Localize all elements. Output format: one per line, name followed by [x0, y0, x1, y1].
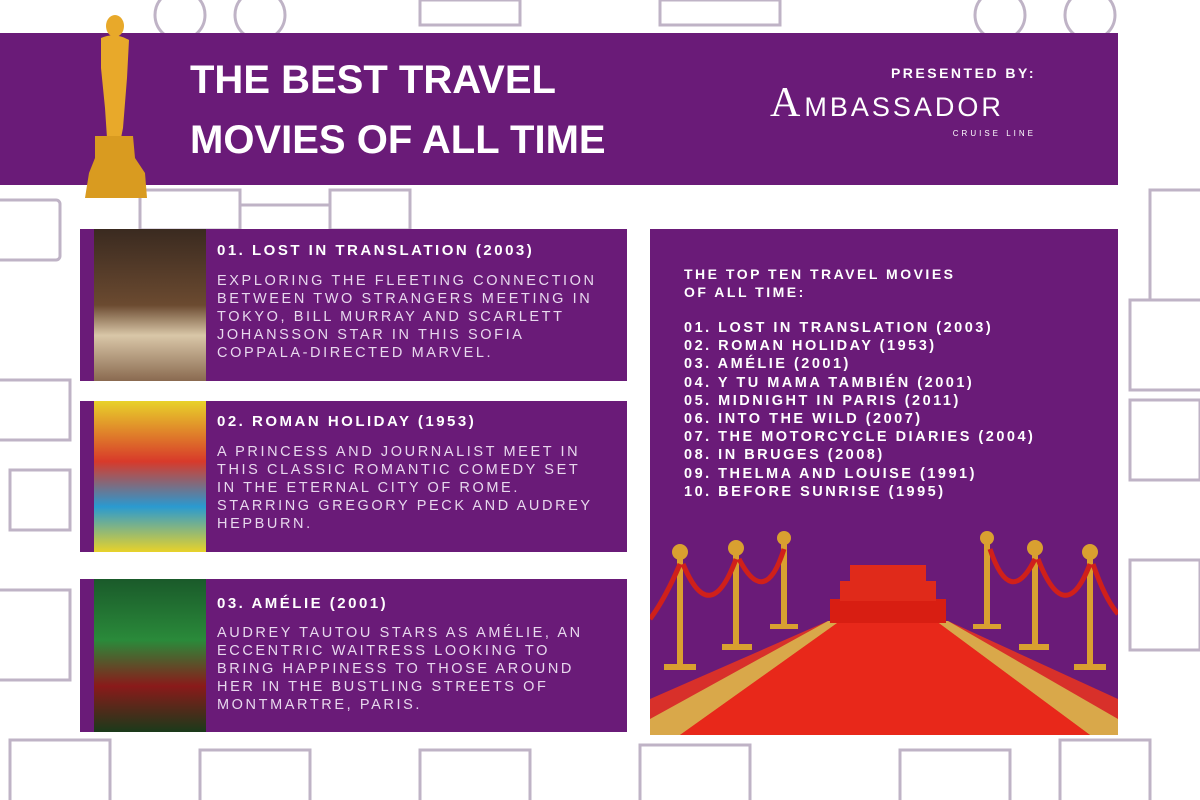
list: 05. MIDNIGHT IN PARIS (2011)	[684, 393, 961, 409]
list heading	[684, 266, 956, 300]
list: 03. AMÉLIE (2001)	[684, 356, 851, 372]
list: 09. THELMA AND LOUISE (1991)	[684, 466, 977, 482]
list heading: THE TOP TEN TRAVEL MOVIES	[684, 266, 956, 282]
text 1: EXPLORING THE FLEETING CONNECTION BETWEEN TWO STRANGERS MEETING IN TOKYO, BILL MURRAY AND SCARLETT JOHANSSON STAR IN THIS SOFIA COPPALA-DIRECTED MARVEL.	[217, 273, 597, 361]
header band	[0, 33, 1118, 185]
list: 08. IN BRUGES (2008)	[684, 447, 885, 463]
heading 2: 02. ROMAN HOLIDAY (1953)	[217, 413, 476, 430]
panel: movie 3	[80, 579, 627, 732]
presented by logo: PRESENTED BY:	[891, 65, 1036, 81]
title: THE BEST TRAVEL	[190, 58, 556, 102]
presented by logo	[770, 65, 1036, 138]
title: MOVIES OF ALL TIME	[190, 118, 606, 162]
icon: oscar statue	[85, 15, 147, 198]
panel: movie 2	[80, 401, 627, 552]
list: 10. BEFORE SUNRISE (1995)	[684, 484, 946, 500]
heading 1: 01. LOST IN TRANSLATION (2003)	[217, 242, 534, 259]
list heading: OF ALL TIME:	[684, 284, 806, 300]
panel: top ten list	[650, 229, 1118, 735]
panel: movie 1	[80, 229, 627, 381]
poster 3	[94, 579, 206, 732]
presented by logo: AMBASSADOR	[770, 80, 1004, 126]
heading 3: 03. AMÉLIE (2001)	[217, 595, 388, 612]
text 3: AUDREY TAUTOU STARS AS AMÉLIE, AN ECCENTRIC WAITRESS LOOKING TO BRING HAPPINESS TO THOSE AROUND HER IN THE BUSTLING STREETS OF MONTMARTRE, PARIS.	[217, 625, 583, 713]
list: 01. LOST IN TRANSLATION (2003)	[684, 320, 993, 336]
text 2: A PRINCESS AND JOURNALIST MEET IN THIS CLASSIC ROMANTIC COMEDY SET IN THE ETERNAL CITY OF ROME. STARRING GREGORY PECK AND AUDREY HEPBURN.	[217, 444, 592, 532]
title	[190, 58, 606, 162]
list	[684, 320, 1035, 500]
presented by logo: CRUISE LINE	[953, 129, 1036, 138]
list: 07. THE MOTORCYCLE DIARIES (2004)	[684, 429, 1035, 445]
poster 2	[94, 401, 206, 552]
illustration: red carpet	[650, 531, 1118, 735]
list: 02. ROMAN HOLIDAY (1953)	[684, 338, 937, 354]
poster 1	[94, 229, 206, 381]
list: 04. Y TU MAMA TAMBIÉN (2001)	[684, 375, 974, 391]
list: 06. INTO THE WILD (2007)	[684, 411, 923, 427]
